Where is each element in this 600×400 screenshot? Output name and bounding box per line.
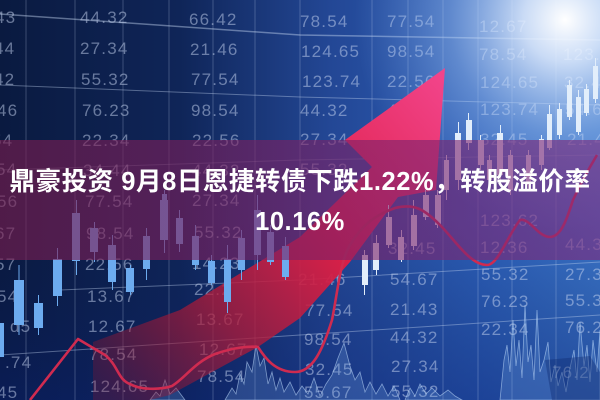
number columns: 78.54 [479,45,528,64]
number columns: 22.2 [194,280,232,299]
number columns: 123.62 [480,211,539,230]
number columns: 55.32 [81,70,130,89]
title band [0,140,600,260]
number columns: 77.54 [305,301,354,320]
number columns: 27.34 [80,39,129,58]
number columns: 44.32 [387,101,436,120]
red trend line [30,155,597,400]
number columns: 98.54 [387,42,436,61]
rising red arrow [93,68,445,400]
number columns: 27.34 [300,130,349,149]
number columns: 76.23 [82,101,131,120]
number columns: 44.32 [300,101,349,120]
number columns: 27.34 [192,191,241,210]
number columns: 44.32 [390,328,439,347]
number columns: 32.45 [388,239,437,258]
number columns: 12.67 [88,317,137,336]
blue candles left [0,190,289,357]
dark patch [545,356,600,400]
number columns: 21.43 [390,300,439,319]
number columns: 77.54 [387,12,436,31]
number columns: 32.45 [480,130,529,149]
pale candles right [362,58,598,295]
number columns: 123.74 [302,72,361,91]
number columns: 44.32 [80,8,129,27]
number columns: 21.46 [298,270,347,289]
number columns: 34.44 [83,161,132,180]
number columns: 55.32 [481,265,530,284]
number columns: 14.23 [192,254,241,273]
number columns: 55.32 [300,160,349,179]
number columns: 77.54 [191,70,240,89]
number columns: 32.45 [305,360,354,379]
number columns: 78.54 [89,345,138,364]
number columns: 12.36 [480,238,529,257]
waveform bottom [150,305,600,400]
title: 鼎豪投资 9月8日恩捷转债下跌1.22%，转股溢价率 [9,168,591,196]
number columns: d5 [10,317,31,336]
number columns: 76.2 [552,363,590,382]
number columns: 22.56 [192,131,241,150]
number columns: 54.67 [390,270,439,289]
number columns: 66.42 [189,10,238,29]
number columns: 77.54 [85,192,134,211]
number columns: 12.67 [479,17,528,36]
number columns: 55.32 [194,223,243,242]
number columns: 98.54 [86,224,135,243]
number columns: 124.65 [301,42,360,61]
number columns: 44.32 [192,161,241,180]
number columns: 98.54 [304,330,353,349]
title [9,168,591,236]
number columns: 22.34 [481,320,530,339]
number columns: 22.56 [387,72,436,91]
number columns: 12.67 [199,340,248,359]
title: 10.16% [255,208,345,236]
number columns: 124.65 [480,73,539,92]
number columns: 78.54 [197,367,246,386]
number columns: 76.23 [481,292,530,311]
candlesticks [0,58,598,357]
number columns: 22.56 [85,255,134,274]
number columns: 98.54 [191,101,240,120]
number columns: 78.54 [300,12,349,31]
number columns: 13.67 [196,310,245,329]
number columns: 123.74 [480,100,539,119]
number columns: 124.65 [90,377,149,396]
number columns: 21.46 [190,40,239,59]
number columns: .74 [5,353,32,372]
number columns: 13.67 [87,287,136,306]
number columns: 22.34 [82,131,131,150]
number columns: 27.34 [391,357,440,376]
